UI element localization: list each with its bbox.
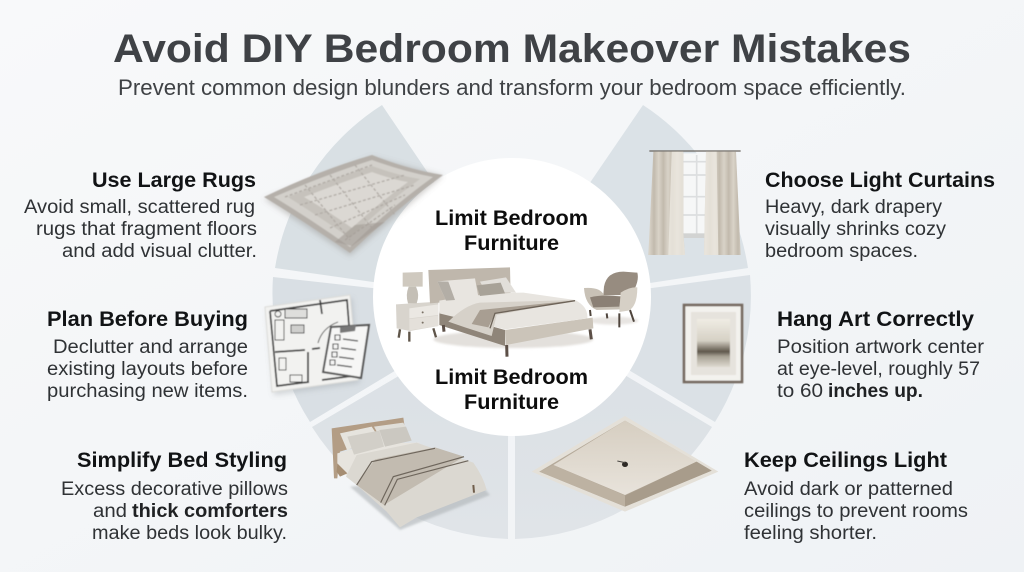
bed frame (439, 312, 593, 357)
text block: Choose Light Curtains: visually shrinks cozy (765, 219, 947, 240)
text block: Choose Light Curtains: bedroom spaces. (765, 241, 918, 262)
text block: Simplify Bed Styling: thick comforters (132, 501, 288, 522)
left curtain (648, 152, 685, 255)
text block: Simplify Bed Styling: and (93, 501, 127, 522)
title: Avoid DIY Bedroom Makeover Mistakes (113, 27, 911, 71)
pillows (340, 423, 412, 455)
text block: Keep Ceilings Light: feeling shorter. (744, 523, 877, 544)
text block: Use Large Rugs: Avoid small, scattered rug (24, 197, 255, 218)
text block: Plan Before Buying: existing layouts before (47, 359, 248, 380)
text block: Simplify Bed Styling: Excess decorative pillows (61, 479, 288, 500)
headboard (428, 267, 511, 303)
clipboard checklist (323, 325, 369, 378)
bed leg (470, 485, 477, 493)
center circle (373, 158, 651, 436)
text block: Plan Before Buying: Plan Before Buying (47, 307, 248, 331)
text block: Choose Light Curtains: Heavy, dark drapery (765, 197, 943, 218)
folded band (357, 447, 464, 505)
text block: Hang Art Correctly: inches up. (828, 381, 923, 402)
icon: area rug (264, 155, 443, 256)
headboard (332, 418, 405, 478)
center heading bottom: Limit Bedroom (435, 365, 588, 389)
text block: Plan Before Buying: purchasing new items. (47, 381, 248, 402)
center heading top (435, 206, 588, 255)
icon: floor plan with checklist (265, 295, 369, 395)
armchair (584, 272, 638, 327)
text block: Use Large Rugs: rugs that fragment floors (36, 219, 257, 240)
center heading bottom (435, 365, 588, 414)
text block: Use Large Rugs: and add visual clutter. (62, 241, 257, 262)
lamp (403, 272, 423, 303)
icon: bed with simple bedding (332, 418, 490, 530)
text block: Hang Art Correctly: to 60 (777, 381, 823, 402)
icon: framed art (684, 305, 742, 382)
mattress side (337, 443, 420, 485)
text block: Hang Art Correctly (777, 307, 985, 402)
nightstand (396, 302, 438, 342)
text block: Use Large Rugs (24, 168, 257, 262)
floor plan walls (270, 300, 352, 386)
center illustration: bed, nightstand and armchair (396, 267, 638, 357)
text block: Use Large Rugs: Use Large Rugs (92, 168, 256, 192)
text block: Choose Light Curtains: Choose Light Curtains (765, 168, 995, 192)
text block: Simplify Bed Styling: make beds look bulky. (92, 523, 287, 544)
pillows (437, 277, 516, 301)
text block: Plan Before Buying: Declutter and arrange (53, 337, 248, 358)
text block: Hang Art Correctly: at eye-level, roughly 57 (777, 359, 980, 380)
text block: Choose Light Curtains (765, 168, 995, 262)
text block: Keep Ceilings Light: ceilings to prevent rooms (744, 501, 968, 522)
text block: Hang Art Correctly: Position artwork center (777, 337, 985, 358)
center heading top: Limit Bedroom (435, 206, 588, 230)
center heading top: Furniture (464, 231, 559, 255)
window (682, 153, 707, 238)
center heading bottom: Furniture (464, 390, 559, 414)
duvet (439, 293, 587, 329)
sheer left overlay (668, 152, 685, 255)
right curtain (704, 152, 741, 255)
text block: Simplify Bed Styling (61, 448, 288, 544)
duvet (346, 443, 487, 527)
wheel segments (272, 105, 751, 539)
light fixture (617, 461, 628, 467)
stripes (357, 448, 468, 505)
rod (649, 149, 741, 153)
icon: ceiling panel (532, 416, 718, 512)
text block: Plan Before Buying (47, 307, 248, 402)
icon: light curtains on window (648, 151, 741, 255)
text block: Keep Ceilings Light: Avoid dark or patterned (744, 479, 953, 500)
text block: Simplify Bed Styling: Simplify Bed Styling (77, 448, 287, 472)
text block: Keep Ceilings Light: Keep Ceilings Light (744, 448, 947, 472)
subtitle: Prevent common design blunders and transform your bedroom space efficiently. (118, 75, 906, 100)
throw blanket (448, 300, 577, 336)
sheer right overlay (704, 152, 718, 255)
text block: Hang Art Correctly: Hang Art Correctly (777, 307, 974, 331)
text block: Keep Ceilings Light (744, 448, 968, 544)
